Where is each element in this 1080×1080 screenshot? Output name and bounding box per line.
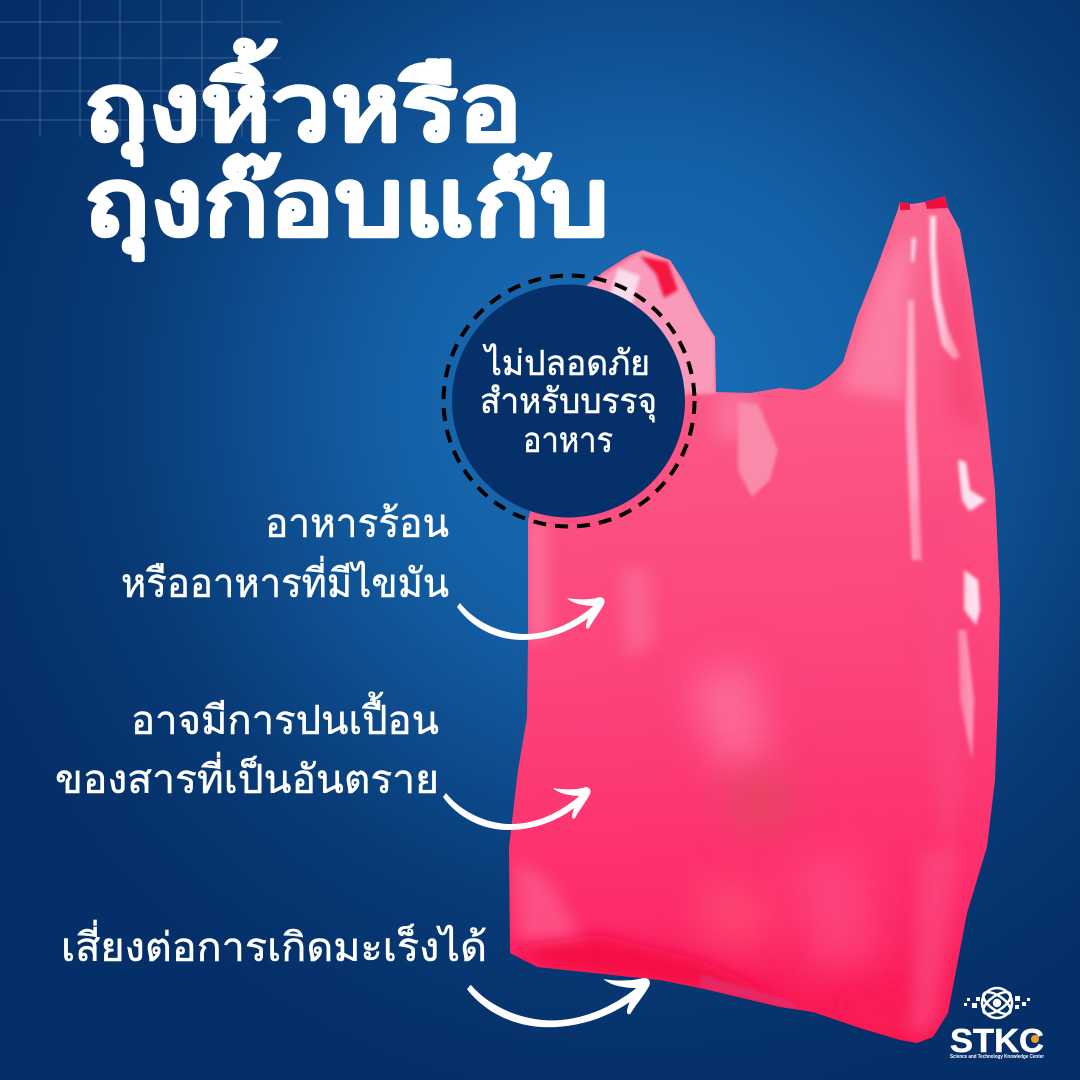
text: possible contamination: ของสารที่เป็นอันตราย <box>55 752 439 802</box>
callout circle: not safe for food: สำหรับบรรจุ <box>480 382 657 422</box>
right handle highlights <box>840 230 912 400</box>
text: hot or fatty food <box>121 502 449 606</box>
text: possible contamination <box>55 691 439 802</box>
text: mold risk: เสี่ยงต่อการเกิดมะเร็งได้ <box>61 920 487 970</box>
plastic bag <box>500 190 1010 1050</box>
callout circle: not safe for food: อาหาร <box>523 421 613 460</box>
arrow 1 <box>457 597 604 640</box>
right side fold flakes <box>958 460 986 510</box>
front folds <box>738 402 778 497</box>
logo tagline: Science and Technology Knowledge Center <box>950 1054 1044 1060</box>
logo wordmark: STKC <box>950 1022 1044 1059</box>
arrow 3 <box>467 978 650 1027</box>
arrow 2 <box>443 787 590 830</box>
background grid <box>0 0 281 137</box>
callout circle: not safe for food <box>444 276 694 526</box>
callout circle: not safe for food: ไม่ปลอดภัย <box>482 343 650 383</box>
logo: STKC <box>950 988 1044 1060</box>
text: hot or fatty food: หรืออาหารที่มีไขมัน <box>121 556 449 606</box>
text: possible contamination: อาจมีการปนเปื้อน <box>131 691 439 743</box>
left handle highlights <box>587 250 716 394</box>
title: ถุงหิ้วหรือ <box>84 38 522 166</box>
title: ถุงก๊อบแก๊บ <box>84 150 609 261</box>
logo icon: atom <box>964 988 1030 1018</box>
title <box>84 38 609 261</box>
bottom darker edge <box>510 935 790 1000</box>
text: hot or fatty food: อาหารร้อน <box>265 502 449 546</box>
